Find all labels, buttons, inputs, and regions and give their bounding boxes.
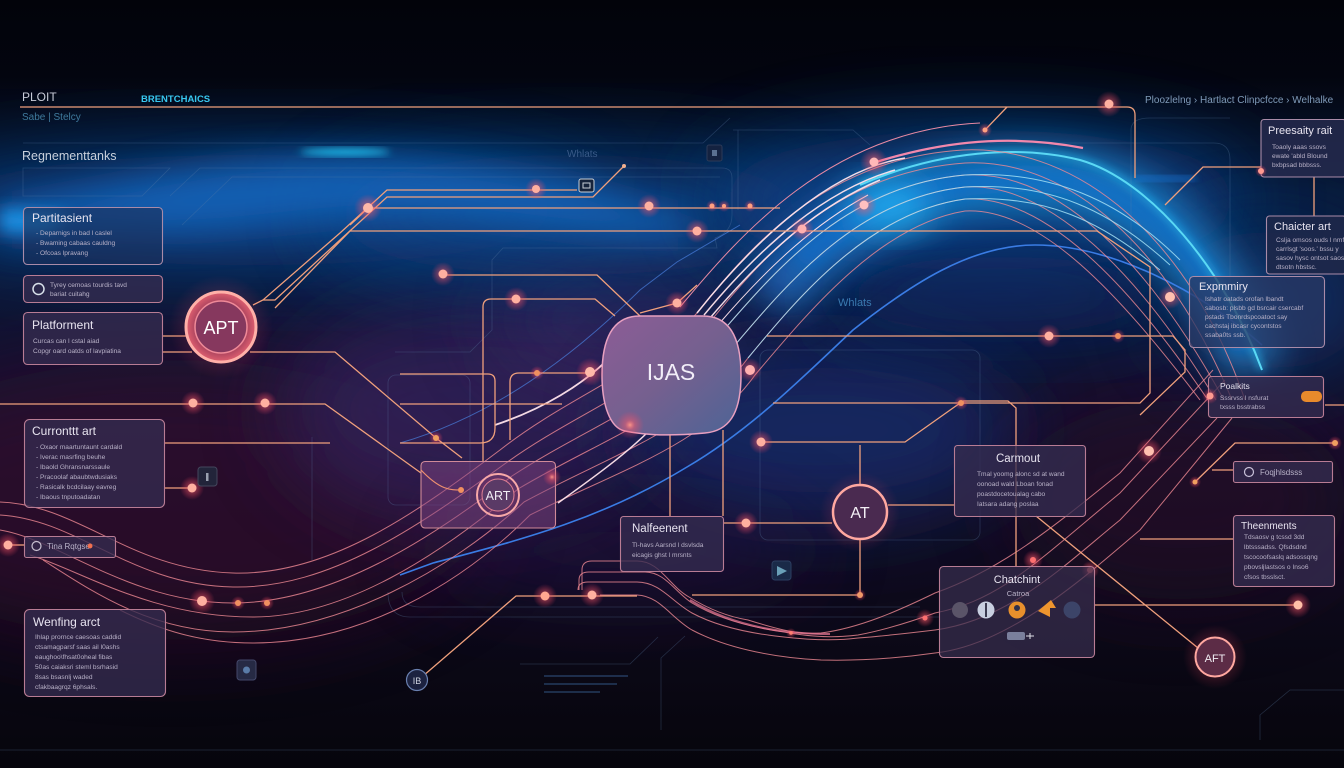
panel: Partitasient: - Bwaming cabaas cauldng [36, 240, 116, 247]
connector lines [0, 107, 1344, 676]
panel: Chatchint [940, 566, 1094, 658]
panel: Curronttt art: Curronttt art [32, 424, 97, 438]
panel: Expmmiry: cachstaj ibcasr cycontstos [1205, 323, 1282, 330]
header right navigation: Ploozlelng › Hartlact Clinpcfcce › Welhalke [1145, 95, 1334, 106]
header left [22, 90, 210, 163]
panel: Theenments: tscocoofsaslq adsossqng [1244, 554, 1318, 561]
panel: Curronttt art: - Oxaor maartuntaunt cardald [36, 444, 122, 451]
panel: Chaicter art [1266, 216, 1344, 274]
panel: Curronttt art: - Ibaold Ghransnarssaule [36, 464, 110, 471]
floating labels [567, 149, 872, 309]
orange toggle [1301, 391, 1322, 402]
icon: tile top [707, 145, 722, 161]
panel: Chaicter art: carrlsgt 'soos.' bssu y [1276, 246, 1339, 253]
panel: Poalkits: Poalkits [1220, 381, 1250, 391]
floating labels: Whlats [567, 149, 598, 160]
panel: Expmmiry [1190, 276, 1324, 348]
panel: Partitasient [24, 208, 162, 264]
panel: Partitasient: Partitasient [32, 211, 93, 225]
panel: note [24, 276, 162, 302]
panel: Wenfing arct: Ihlap prornce caesoas caddid [35, 634, 121, 641]
panel: Halfeenent: Tl-havs Aarsnd l dsvlsda [632, 542, 704, 549]
floating labels: Whlats [838, 297, 872, 309]
panel: Curronttt art: - Pracoolaf abaubtwdusiaks [36, 474, 118, 481]
panel: Theenments [1234, 516, 1334, 586]
panel: Preesaity rait: bxbpsad bbbsss. [1272, 162, 1322, 169]
panel: Carmout: Tmal yoomg alonc sd at wand [977, 471, 1065, 478]
panel: Carmout [954, 446, 1086, 516]
icon: AT node: AT [850, 505, 870, 522]
panel: Halfeenent: Nalfeenent [632, 523, 688, 535]
panel: Theenments: cfsos tbsslsct. [1244, 574, 1285, 581]
panel: Poalkits [1202, 376, 1324, 418]
panel: Carmout: Carmout [996, 453, 1041, 465]
white highlights [495, 158, 1180, 503]
header left: Sabe | Stelcy [22, 112, 81, 123]
panel: Preesaity rait [1255, 120, 1344, 177]
panel: Theenments: lbtsssadss. Qfsdsdnd [1244, 544, 1307, 551]
panel: Expmmiry: sabosb: plsbb gd bsrcair csercabf [1205, 305, 1303, 312]
panel: Platforment: Curcas can l cstal aiad [33, 338, 100, 345]
panel: Preesaity rait: Preesaity rait [1268, 125, 1332, 137]
panel: Platforment: Copgr oard oatds of lavpiatina [33, 348, 121, 355]
panel: note: Tyrey cemoas tourdis tavd [50, 282, 127, 289]
panel: ART box [421, 462, 561, 528]
panel: Curronttt art: - Ibaous tnputoadatan [36, 494, 100, 501]
icon: APT node: APT [203, 318, 239, 338]
central hub: IJAS [576, 316, 762, 439]
icon: AFT node [1183, 625, 1247, 689]
icon: circular badge: IB [413, 676, 421, 686]
panel: Poalkits: txsss bsstrabss [1220, 404, 1266, 411]
icon: tile centre [772, 561, 791, 580]
panel: Wenfing arct [24, 610, 166, 696]
panel: Carmout: Iatsara adang poslaa [977, 501, 1039, 508]
icon row [952, 600, 1080, 618]
panel: Expmmiry: pstads Tbonrdspcoatoct say [1205, 314, 1288, 321]
panel: Chatchint: Catroa [1007, 589, 1030, 598]
panel: Wenfing arct: Wenfing arct [33, 615, 101, 629]
panel: Expmmiry: ssaba0ts ssb. [1205, 332, 1245, 339]
panel: Carmout: poastdocetoualag cabo [977, 491, 1046, 498]
panel: pill label right [1234, 462, 1332, 482]
panel: Poalkits: Sssrvss l nsfurat [1220, 395, 1269, 402]
header left: PLOIT [22, 90, 57, 104]
glow nodes [0, 91, 1342, 638]
panel: Preesaity rait: Toaoly aaas ssovs [1272, 144, 1327, 151]
panel: Theenments: pbovsljlastsos o Inso6 [1244, 564, 1309, 571]
panel: note: bariat cuitahg [50, 291, 90, 298]
icon: AT node [820, 472, 900, 552]
icon: circular badge [406, 670, 428, 690]
icon: small tile lower [237, 660, 256, 680]
panel: Chaicter art: dtsotn hbstsc. [1276, 264, 1317, 271]
panel: pill label right: Foqjhlsdsss [1260, 468, 1302, 477]
panel: Preesaity rait: ewate 'abld Blound [1272, 153, 1328, 160]
central hub: IJAS: IJAS [647, 359, 695, 385]
panel: pill label left [24, 536, 116, 558]
panel: Curronttt art: - Iverac masrfing beuhe [36, 454, 106, 461]
header left: BRENTCHAICS [141, 94, 210, 105]
panel: Wenfing arct: cfakbaagrqz 6phsals. [35, 684, 97, 691]
panel: Wenfing arct: ctsamagparsf saas ail l0ashs [35, 644, 120, 651]
panel: Wenfing arct: eaughoo\fhsat0oheal fibas [35, 654, 113, 661]
wave bundle: pink strands [0, 150, 1245, 660]
cyan arc [680, 123, 1262, 370]
panel: Halfeenent [620, 516, 724, 572]
icon: APT node [169, 275, 273, 379]
blue flow lines [400, 225, 1262, 575]
panel: Platforment [24, 312, 162, 364]
panel: Carmout: oonoad wald Lboan fonad [977, 481, 1053, 488]
small toggle [1007, 632, 1034, 640]
panel: ART box: ART [486, 489, 511, 503]
panel: Chatchint: Chatchint [994, 574, 1040, 586]
panel: Theenments: Theenments [1241, 521, 1297, 532]
panel: Wenfing arct: 50as caiaksri steml bsrhasid [35, 664, 118, 671]
panel: Curronttt art: - Rasicalk bcdcilaay eavreg [36, 484, 117, 491]
panel: Expmmiry: Ishatr oatads orofan lbandt [1205, 296, 1284, 303]
icon: chip on line [579, 179, 594, 192]
panel: pill label left: Tina Rqtgse [47, 542, 90, 551]
icon: AFT node: AFT [1205, 653, 1226, 665]
panel: Curronttt art [24, 420, 164, 508]
panel: Partitasient: - Ofcoas lpravang [36, 250, 88, 257]
panel: Partitasient: - Deparnigs in bad l caslel [36, 230, 112, 237]
panel: Wenfing arct: 8sas bsasnlj waded [35, 674, 93, 681]
panel: Platforment: Platforment [32, 318, 94, 332]
panel: Theenments: Tdsaosv g tcssd 3dd [1244, 534, 1305, 541]
panel: Expmmiry: Expmmiry [1199, 281, 1248, 293]
icon: small tile [198, 467, 217, 486]
header left: Regnementtanks [22, 149, 117, 163]
panel: Chaicter art: sasov hysc ontsot saos [1276, 255, 1344, 262]
panel: Halfeenent: eicagis ghst l mrsnts [632, 552, 692, 559]
panel: Chaicter art: Chaicter art [1274, 221, 1331, 233]
